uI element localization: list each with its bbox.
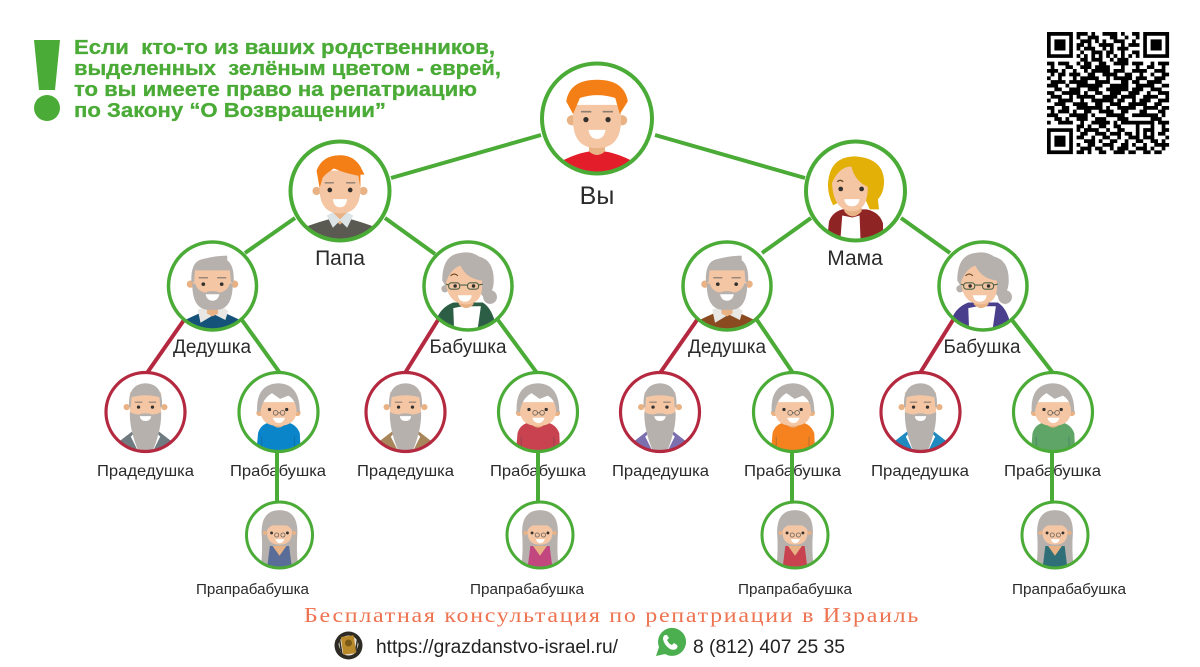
heading: notice text (74, 37, 501, 122)
node: Прапрабабушка 2 (470, 502, 585, 598)
node: Мама (806, 142, 905, 270)
node: Прабабушка 3 (744, 372, 841, 480)
node: Прадедушка 3: Прадедушка (612, 463, 709, 480)
node: Бабушка (папа): Бабушка (430, 337, 507, 358)
node: Бабушка (мама): Бабушка (944, 337, 1021, 358)
node: Дедушка (папа): Дедушка (173, 337, 251, 358)
node: Прабабушка 1 (230, 372, 326, 480)
icon: exclamation mark (34, 40, 60, 121)
node: Прапрабабушка 4 (1012, 502, 1127, 598)
node: Прапрабабушка 2: Прапрабабушка (470, 581, 585, 598)
node: Прабабушка 2: Прабабушка (490, 463, 586, 480)
node: Прадедушка 2: Прадедушка (357, 463, 454, 480)
QR code (1045, 30, 1171, 156)
website link: https://grazdanstvo-israel.ru/ (376, 637, 619, 658)
node: Прабабушка 4 (1004, 372, 1101, 480)
node: Прадедушка 4: Прадедушка (871, 463, 969, 480)
node: Бабушка (папа) (424, 242, 512, 358)
node: Папа: Папа (315, 247, 365, 270)
heading: notice text: то вы имеете право на репатриацию (74, 79, 477, 101)
icon: passport emblem (334, 632, 362, 660)
node: Прапрабабушка 4: Прапрабабушка (1012, 581, 1127, 598)
node: Папа (290, 142, 390, 270)
node: Дедушка (мама) (683, 242, 771, 358)
node: Прабабушка 3: Прабабушка (744, 463, 841, 480)
node: Мама: Мама (827, 247, 883, 270)
phone number: 8 (812) 407 25 35 (693, 637, 845, 658)
node: Прапрабабушка 1: Прапрабабушка (196, 581, 310, 598)
heading: notice text: выделенных зелёным цветом - еврей, (74, 58, 501, 80)
connectors: red lines to great-grandfathers (147, 320, 953, 373)
icon: WhatsApp (656, 628, 686, 656)
node: Вы: Вы (580, 182, 614, 210)
node: Прапрабабушка 3: Прапрабабушка (738, 581, 853, 598)
node: Прадедушка 3 (612, 372, 709, 480)
node: Прадедушка 1: Прадедушка (97, 463, 194, 480)
connectors: green lines to great-grandmothers (242, 320, 1053, 373)
node: Вы (542, 64, 652, 210)
node: Прадедушка 2 (357, 372, 454, 480)
node: Прабабушка 4: Прабабушка (1004, 463, 1101, 480)
connectors: generation 1 and 2 (245, 135, 950, 254)
node: Прадедушка 4 (871, 372, 969, 480)
footer heading: Бесплатная консультация по репатриации в Израиль (304, 603, 920, 627)
node: Прадедушка 1 (97, 372, 194, 480)
node: Прапрабабушка 3 (738, 502, 853, 598)
node: Прапрабабушка 1 (196, 502, 312, 598)
heading: notice text: Если кто-то из ваших родственников, (74, 37, 495, 59)
node: Прабабушка 1: Прабабушка (230, 463, 326, 480)
node: Дедушка (папа) (168, 242, 256, 358)
node: Дедушка (мама): Дедушка (688, 337, 766, 358)
connectors: vertical lines to great-great-grandmothers (277, 451, 1052, 502)
heading: notice text: по Закону “О Возвращении” (74, 100, 386, 122)
node: Бабушка (мама) (939, 242, 1027, 358)
node: Прабабушка 2 (490, 372, 586, 480)
